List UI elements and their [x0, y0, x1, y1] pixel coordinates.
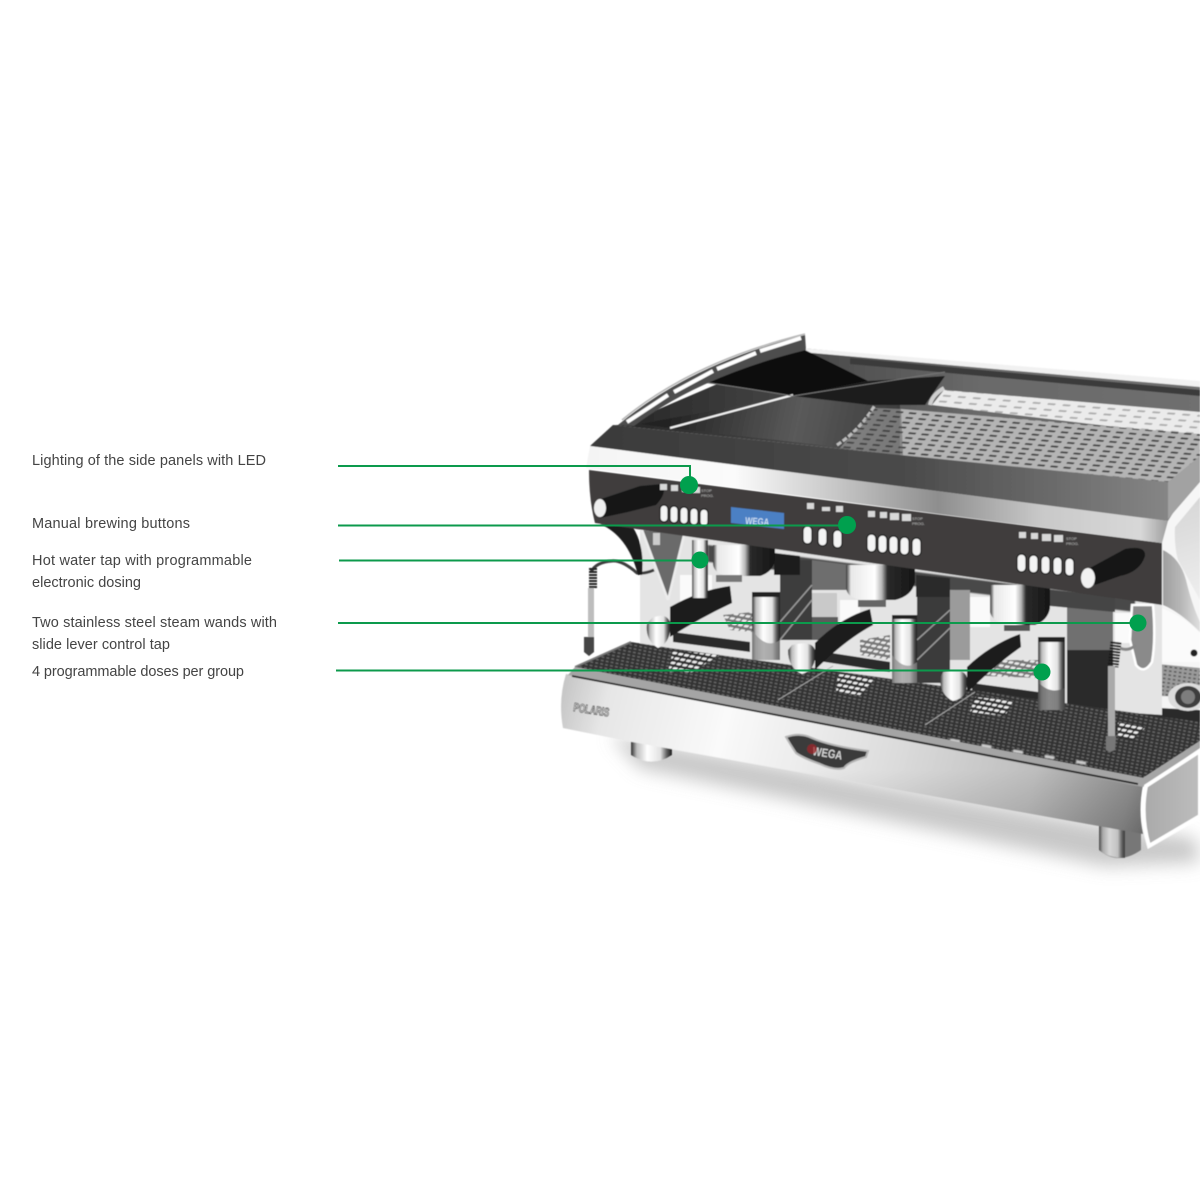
- panel small labels: STOP: [912, 516, 923, 521]
- top rim with LED slots: [618, 334, 806, 426]
- callout: hot water tap: Hot water tap with programmable: [32, 553, 252, 569]
- side inner panel: [1175, 497, 1200, 600]
- machine shadow: [610, 735, 1200, 866]
- callout: manual brewing buttons: Manual brewing buttons: [32, 516, 190, 532]
- panel small labels: PROG.: [1066, 541, 1079, 546]
- top dark band: [590, 425, 1200, 521]
- back splash interior: [640, 530, 1162, 715]
- portafilter handles: [647, 586, 1021, 701]
- top cover glass: [613, 348, 1200, 482]
- callout: side panel lighting: Lighting of the side panels with LED: [32, 453, 266, 469]
- rails: [673, 632, 1038, 700]
- logo: POLARIS: POLARIS: [573, 700, 610, 720]
- side lower silver: [1163, 550, 1200, 632]
- tap housing: [1130, 605, 1154, 669]
- panel small labels: STOP: [701, 488, 712, 493]
- display: WEGA: [731, 507, 784, 529]
- buttons: group 3: [867, 534, 921, 556]
- callout: steam wands: Two stainless steel steam wands with: [32, 615, 277, 631]
- machine feet: [631, 735, 1141, 858]
- control panel: [589, 470, 1162, 605]
- end cap: [1144, 751, 1200, 846]
- grating: rear: [932, 390, 1200, 437]
- right side body: [1117, 480, 1200, 770]
- buttons: group 2: [803, 526, 842, 548]
- panel small labels: PROG.: [912, 521, 925, 526]
- illustration: espresso machine: [561, 334, 1200, 866]
- brew group domes: [713, 545, 1050, 631]
- base front panel: [561, 667, 1200, 834]
- left arch and chrome supports: [600, 524, 708, 600]
- panel small labels: STOP: [1066, 536, 1077, 541]
- buttons: group 4: [1017, 554, 1074, 576]
- display: WEGA: WEGA: [745, 516, 769, 529]
- gauge: [1168, 683, 1200, 711]
- callout: hot water tap: [32, 552, 708, 591]
- front white strip: [586, 446, 1168, 543]
- callout: steam wands: [32, 614, 1146, 653]
- chrome columns: [752, 592, 1065, 710]
- knob: right steam: [1081, 548, 1145, 588]
- callout: programmable doses: [32, 664, 1050, 680]
- right side edge: [1168, 456, 1200, 519]
- panel small labels: [701, 488, 1079, 546]
- callout: hot water tap: electronic dosing: [32, 575, 141, 591]
- grating: front: [901, 409, 1200, 482]
- grating reflections: [723, 612, 752, 632]
- callout: programmable doses: 4 programmable doses per group: [32, 664, 244, 680]
- logo badge: WEGA: [786, 735, 868, 769]
- steam wands: [584, 561, 1136, 752]
- callout: side panel lighting: [32, 453, 698, 494]
- dark reflection blocks: [680, 545, 1135, 715]
- drip tray grating: [575, 642, 1200, 778]
- callout: steam wands: slide lever control tap: [32, 637, 170, 653]
- cup icons: [660, 484, 1063, 542]
- knob: left steam: [594, 484, 664, 518]
- buttons: group 1: [660, 505, 708, 526]
- logo badge: WEGA: WEGA: [812, 744, 844, 763]
- panel small labels: PROG.: [701, 493, 714, 498]
- callout: manual brewing buttons: [32, 516, 856, 534]
